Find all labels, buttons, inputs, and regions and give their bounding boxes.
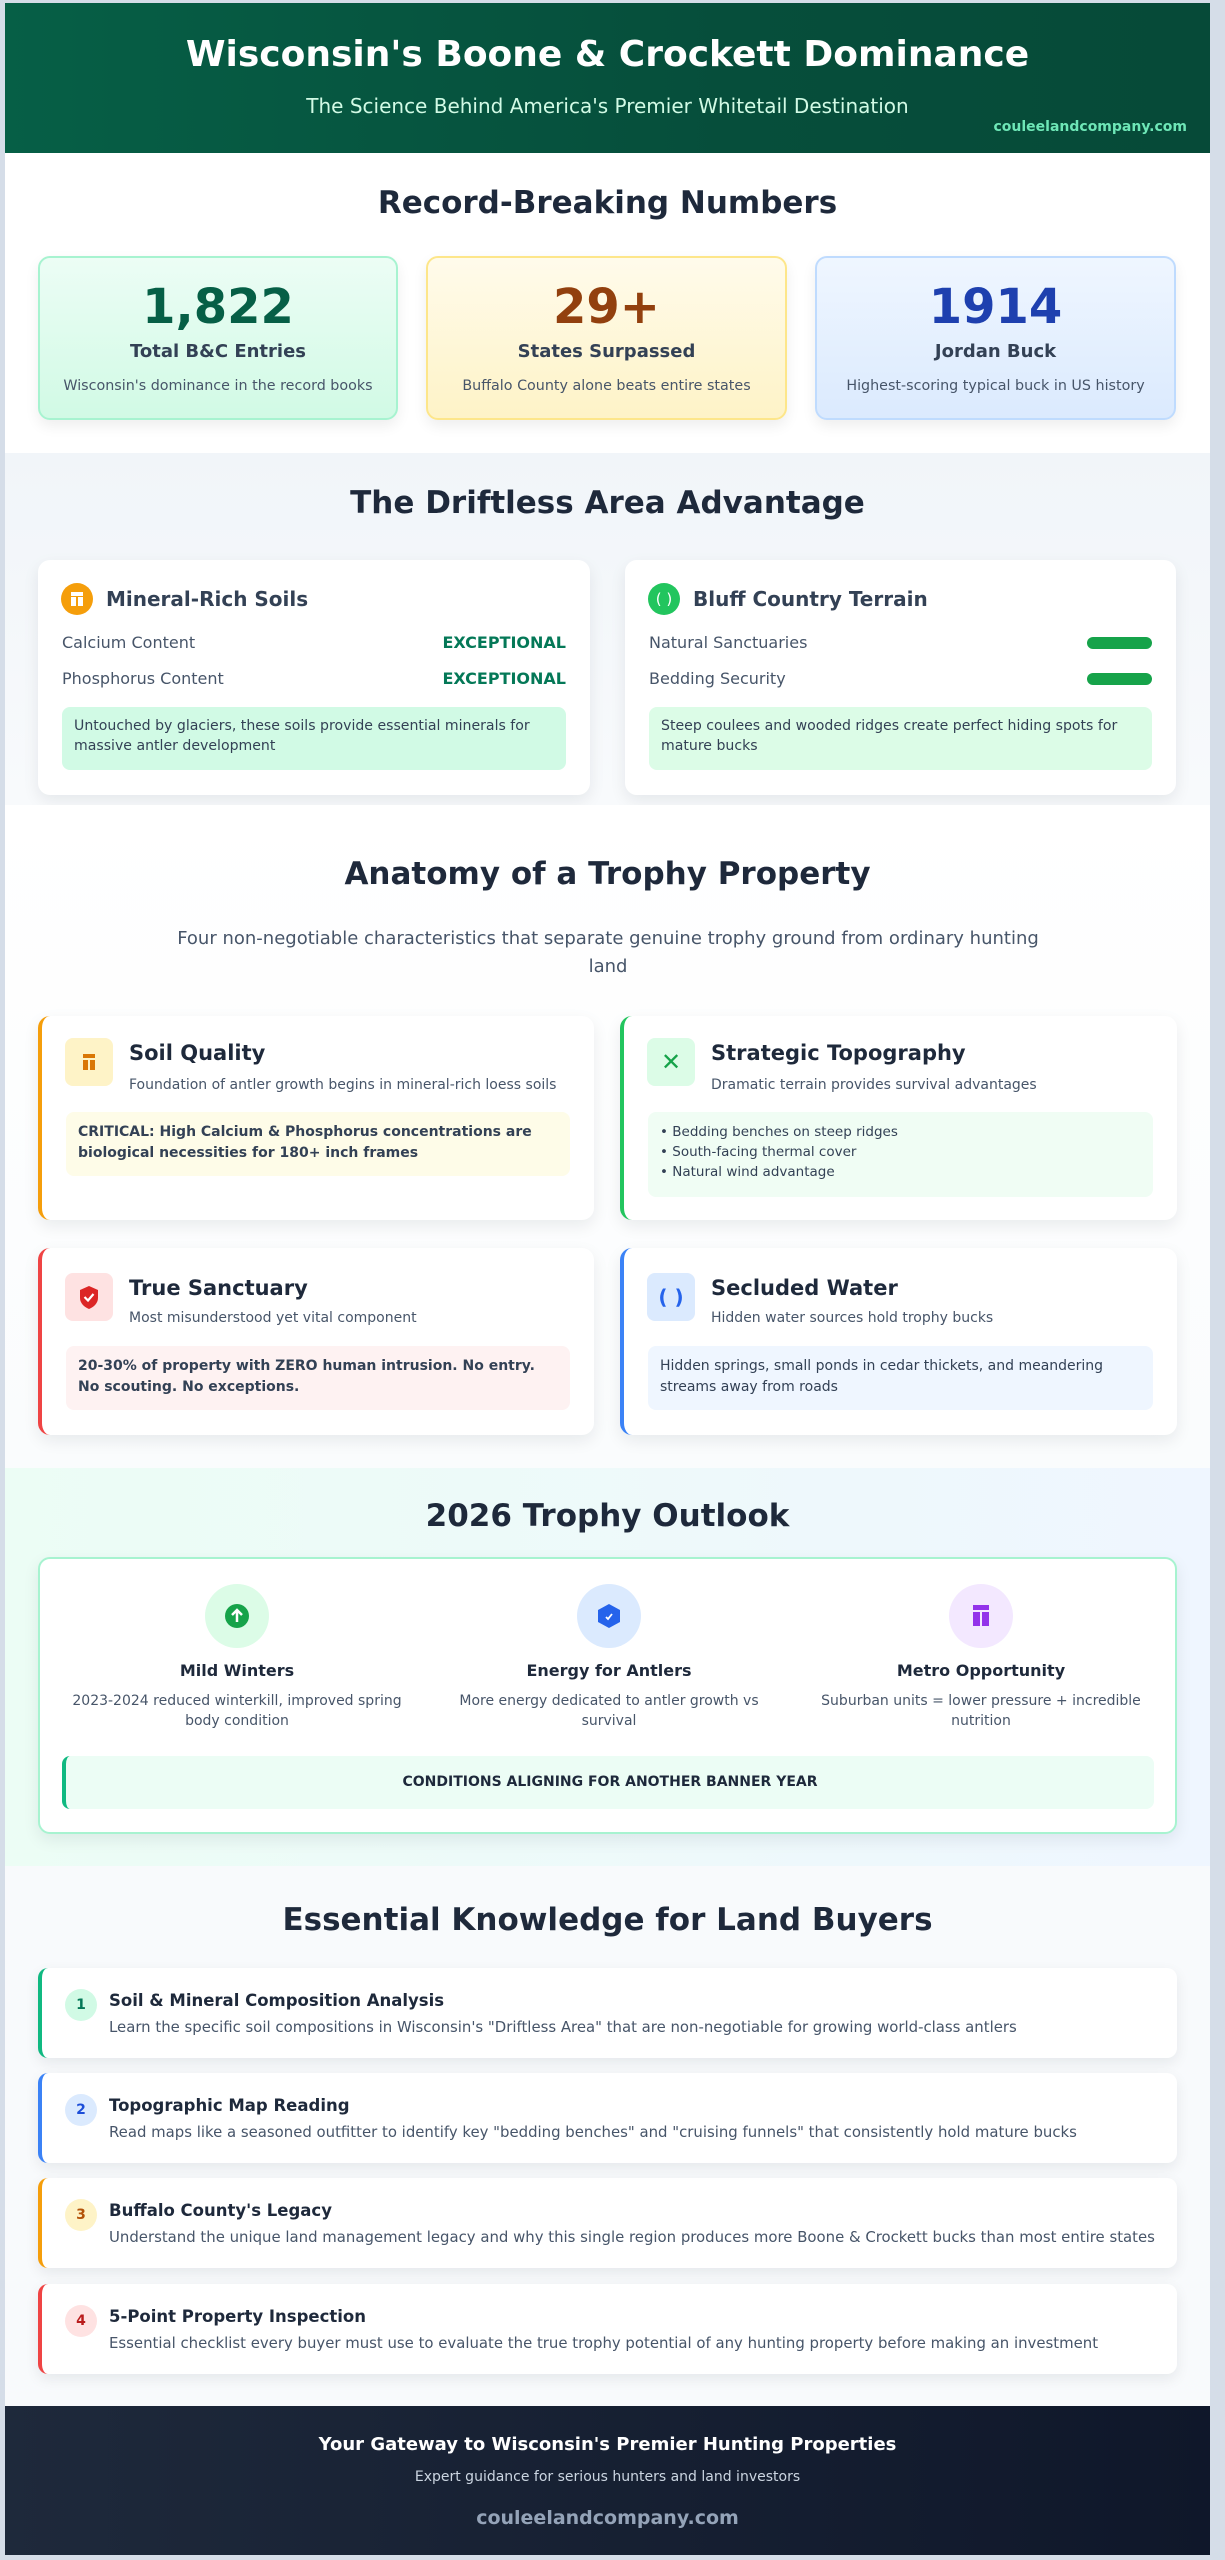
section: essential knowledge <box>5 1866 1210 2406</box>
row: calcium <box>62 633 566 652</box>
stat card: states: States Surpassed <box>518 341 695 362</box>
column: mild winters <box>72 1584 402 1729</box>
note <box>649 707 1152 770</box>
intro text: Four non-negotiable characteristics that separate genuine trophy ground from ordinary hunting land <box>177 928 1039 977</box>
card: strategic topography: Strategic Topography <box>711 1041 966 1065</box>
card: true sanctuary: Most misunderstood yet vital component <box>129 1310 417 1326</box>
panel: outlook card: Metro Opportunity <box>897 1661 1065 1680</box>
footer subtitle: Expert guidance for serious hunters and land investors <box>415 2469 800 2485</box>
domain tag: couleelandcompany.com <box>993 119 1187 135</box>
stat card: entries: Wisconsin's dominance in the record books <box>63 378 373 394</box>
icon: ✕ <box>661 1048 681 1076</box>
footer title: Your Gateway to Wisconsin's Premier Hunting Properties <box>319 2434 896 2455</box>
stat card: states: 29+ <box>553 279 660 335</box>
item 4: 4 <box>76 2313 86 2329</box>
section: record-breaking numbers <box>5 153 1210 453</box>
panel: outlook card: Mild Winters <box>180 1661 294 1680</box>
icon: layout <box>949 1584 1013 1648</box>
item 2: Topographic Map Reading <box>109 2096 350 2115</box>
title: Wisconsin's Boone & Crockett Dominance <box>186 34 1029 75</box>
row: sanctuaries <box>649 633 1152 652</box>
item 4: Essential checklist every buyer must use to evaluate the true trophy potential of any hunting property before making an investment <box>109 2334 1098 2352</box>
heading: Anatomy of a Trophy Property <box>344 856 871 892</box>
row: phosphorus <box>62 669 566 688</box>
card: soil quality: Foundation of antler growth begins in mineral-rich loess soils <box>129 1077 556 1093</box>
icon: ( ) <box>658 1285 684 1309</box>
header <box>5 3 1210 153</box>
row: phosphorus: Phosphorus Content <box>62 669 224 688</box>
list: • Natural wind advantage <box>660 1164 835 1180</box>
heading: Essential Knowledge for Land Buyers <box>282 1902 933 1938</box>
item 3: Buffalo County's Legacy <box>109 2201 332 2220</box>
item 3 <box>38 2178 1177 2268</box>
card: soil quality <box>38 1016 594 1220</box>
stat card: jordan buck: 1914 <box>929 279 1062 335</box>
card: true sanctuary <box>38 1248 594 1435</box>
row: phosphorus: EXCEPTIONAL <box>442 669 566 688</box>
stat card: jordan buck <box>815 256 1176 420</box>
section: anatomy of a trophy property <box>5 805 1210 1468</box>
section: driftless area <box>5 453 1210 805</box>
note: Untouched by glaciers, these soils provide essential minerals for massive antler development <box>74 718 530 754</box>
panel: outlook card: Energy for Antlers <box>526 1661 692 1680</box>
icon: badge <box>577 1584 641 1648</box>
panel title: Bluff Country Terrain <box>693 587 928 611</box>
note: Steep coulees and wooded ridges create perfect hiding spots for mature bucks <box>661 718 1117 754</box>
callout <box>648 1346 1153 1410</box>
list: • South-facing thermal cover <box>660 1144 856 1160</box>
icon <box>65 1273 113 1321</box>
callout <box>66 1346 570 1410</box>
item 2: 2 <box>76 2102 86 2118</box>
callout: CRITICAL: High Calcium & Phosphorus concentrations are biological necessities for 180+ inch frames <box>78 1124 532 1161</box>
card: strategic topography <box>620 1016 1177 1220</box>
list <box>648 1112 1153 1197</box>
stat card: entries: Total B&C Entries <box>130 341 306 362</box>
item 1 <box>38 1968 1177 2058</box>
heading: 2026 Trophy Outlook <box>426 1498 789 1534</box>
row: calcium: EXCEPTIONAL <box>442 633 566 652</box>
callout <box>66 1112 570 1176</box>
row: bedding: Bedding Security <box>649 669 786 688</box>
banner <box>62 1756 1154 1809</box>
row: calcium: Calcium Content <box>62 633 195 652</box>
column: metro opportunity <box>821 1584 1141 1729</box>
item 2 <box>38 2073 1177 2163</box>
item 1: 1 <box>76 1997 86 2013</box>
item 1: Soil & Mineral Composition Analysis <box>109 1991 444 2010</box>
card: true sanctuary: True Sanctuary <box>129 1276 308 1300</box>
stat card: states: Buffalo County alone beats entire states <box>462 378 751 394</box>
panel title: Mineral-Rich Soils <box>106 587 308 611</box>
icon: terrain: ( ) <box>656 590 672 608</box>
note <box>62 707 566 770</box>
list: • Bedding benches on steep ridges <box>660 1124 898 1140</box>
footer <box>5 2406 1210 2555</box>
panel: mineral-rich soils <box>38 560 590 795</box>
icon: soil <box>61 583 93 615</box>
item 4 <box>38 2284 1177 2374</box>
icon: arrow up <box>205 1584 269 1648</box>
stat card: jordan buck: Highest-scoring typical buck in US history <box>846 378 1145 394</box>
callout: Hidden springs, small ponds in cedar thickets, and meandering streams away from roads <box>660 1358 1103 1395</box>
icon: terrain <box>648 583 680 615</box>
panel: bluff country <box>625 560 1176 795</box>
card: secluded water: Secluded Water <box>711 1276 898 1300</box>
section: 2026 trophy outlook <box>5 1468 1210 1866</box>
footer domain: couleelandcompany.com <box>476 2507 739 2529</box>
icon <box>647 1038 695 1086</box>
card: secluded water: Hidden water sources hold trophy bucks <box>711 1310 993 1326</box>
item 4: 5-Point Property Inspection <box>109 2307 366 2326</box>
stat card: entries: 1,822 <box>142 279 294 335</box>
card: strategic topography: Dramatic terrain provides survival advantages <box>711 1077 1037 1093</box>
stat card: entries <box>38 256 398 420</box>
stat card: jordan buck: Jordan Buck <box>935 341 1056 362</box>
row: sanctuaries: Natural Sanctuaries <box>649 633 807 652</box>
panel: outlook card <box>38 1557 1177 1834</box>
item 3: Understand the unique land management legacy and why this single region produces more Boone & Crockett bucks than most entire states <box>109 2228 1155 2246</box>
item 1: Learn the specific soil compositions in Wisconsin's "Driftless Area" that are non-negotiable for growing world-class antlers <box>109 2018 1017 2036</box>
callout: 20-30% of property with ZERO human intrusion. No entry. No scouting. No exceptions. <box>78 1358 535 1395</box>
item 3: 3 <box>76 2207 86 2223</box>
subtitle: The Science Behind America's Premier Whitetail Destination <box>306 94 909 118</box>
column: energy for antlers <box>459 1584 759 1729</box>
banner: CONDITIONS ALIGNING FOR ANOTHER BANNER YEAR <box>402 1774 818 1790</box>
row: bedding <box>649 669 1152 688</box>
icon <box>647 1273 695 1321</box>
item 2: Read maps like a seasoned outfitter to identify key "bedding benches" and "cruising funnels" that consistently hold mature bucks <box>109 2123 1077 2141</box>
card: soil quality: Soil Quality <box>129 1041 265 1065</box>
panel: outlook card: More energy dedicated to antler growth vs survival <box>459 1693 759 1729</box>
panel: outlook card: 2023-2024 reduced winterkill, improved spring body condition <box>72 1693 402 1729</box>
panel: outlook card: Suburban units = lower pressure + incredible nutrition <box>821 1693 1141 1729</box>
card: secluded water <box>620 1248 1177 1435</box>
heading: The Driftless Area Advantage <box>350 485 865 521</box>
stat card: states <box>426 256 787 420</box>
icon <box>65 1038 113 1086</box>
heading: Record-Breaking Numbers <box>378 185 837 221</box>
